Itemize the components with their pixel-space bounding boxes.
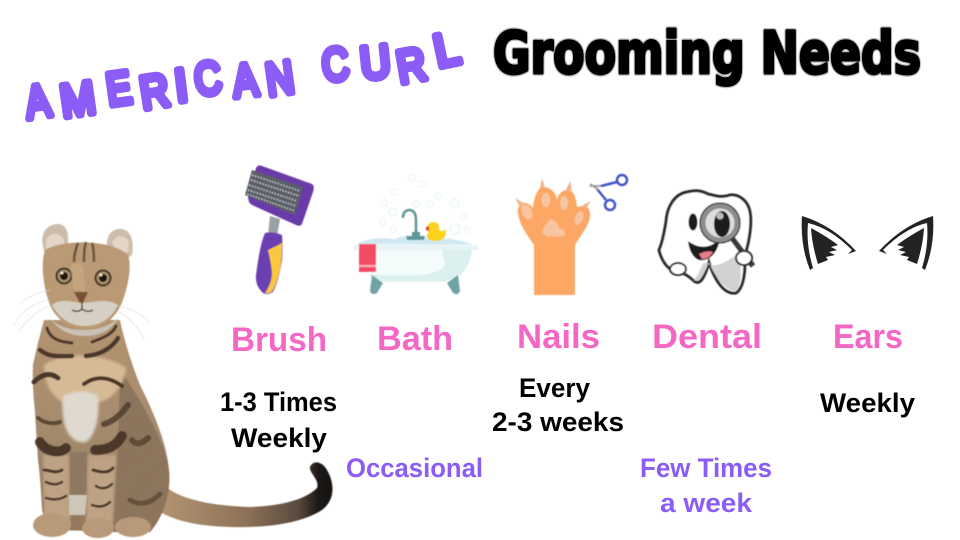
cat head	[43, 242, 130, 330]
label: Dental: Dental	[652, 318, 762, 356]
title: American Curl: N	[263, 51, 297, 106]
cat chest	[44, 356, 126, 408]
cat belly gap	[70, 452, 87, 500]
title: American Curl: A	[22, 74, 54, 129]
icon: cat ears	[802, 216, 933, 270]
title: American Curl: R	[137, 65, 173, 120]
icon: cat paw with scissors	[515, 175, 627, 295]
frequency: bath: Occasional	[346, 453, 483, 483]
label: Nails: Nails	[517, 318, 600, 356]
scissors	[590, 175, 627, 210]
icon: tooth with magnifying glass	[659, 191, 753, 293]
cat paws	[33, 513, 151, 538]
cat tail	[160, 462, 332, 527]
tooth hands	[736, 251, 752, 265]
title: American Curl: C	[319, 37, 351, 91]
title: American Curl: L	[429, 22, 464, 78]
title: American Curl: C	[191, 51, 225, 106]
title: American Curl	[22, 22, 464, 129]
frequency: ears: Weekly	[820, 388, 915, 418]
cat nose	[74, 292, 88, 303]
tooth eye	[688, 214, 698, 230]
magnifying glass	[732, 238, 753, 266]
bath tub	[354, 244, 479, 282]
tooth smile	[688, 238, 720, 260]
icon: slicker brush	[245, 165, 314, 294]
icon: bathtub with rubber duck	[354, 175, 479, 294]
cat body	[33, 320, 169, 532]
label: Ears: Ears	[833, 318, 903, 356]
paw claws	[515, 178, 591, 208]
frequency: dental	[640, 453, 772, 518]
frequency: brush: Weekly	[231, 423, 327, 453]
cat ears	[42, 224, 133, 262]
title: American Curl: A	[230, 53, 260, 107]
frequency: brush: 1-3 Times	[220, 387, 337, 417]
cat whiskers	[14, 290, 150, 338]
bath towel	[359, 244, 376, 272]
title: American Curl: R	[393, 38, 430, 94]
rubber duck	[427, 222, 446, 241]
bath feet	[370, 275, 460, 294]
label: Brush: Brush	[231, 321, 327, 359]
frequency: nails: Every	[519, 373, 590, 403]
frequency: nails	[492, 373, 624, 437]
title: American Curl: I	[172, 59, 190, 112]
title: American Curl: U	[358, 36, 393, 90]
bath faucet	[403, 210, 416, 234]
frequency: brush	[220, 387, 337, 453]
paw pads	[519, 193, 585, 237]
label: Bath: Bath	[377, 320, 453, 358]
title: American Curl: E	[103, 61, 135, 116]
illustration: American Curl cat	[14, 224, 332, 538]
frequency: dental: a week	[660, 488, 753, 518]
cat eyes	[56, 268, 112, 286]
frequency: nails: 2-3 weeks	[492, 407, 624, 437]
bath foam	[357, 236, 474, 245]
cat back mottling	[112, 370, 169, 532]
cat dark stripes	[34, 326, 160, 506]
frequency: dental: Few Times	[640, 453, 772, 483]
cat front legs	[43, 455, 70, 522]
title: American Curl: M	[57, 72, 99, 128]
